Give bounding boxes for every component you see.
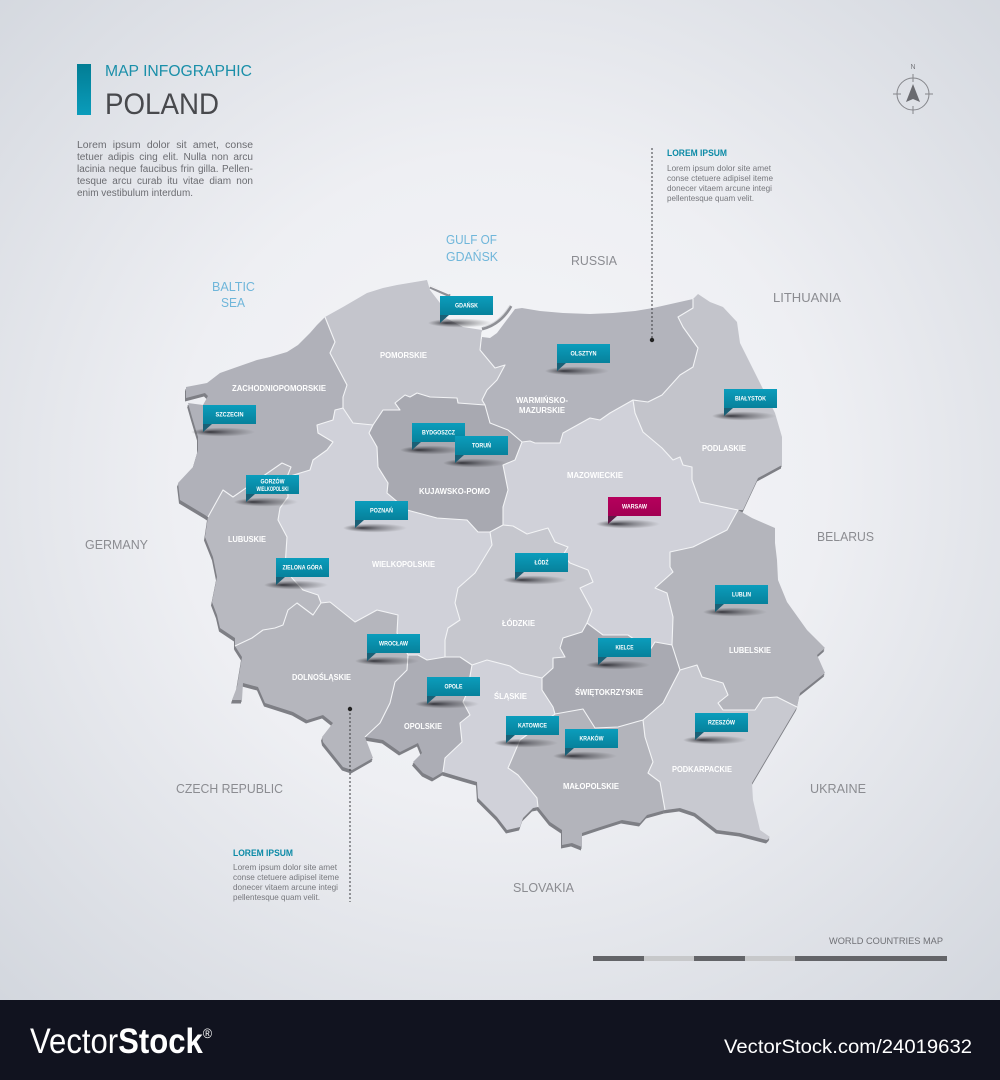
region: Lubelskie (655, 510, 825, 710)
country labels: CZECH REPUBLIC (176, 781, 283, 796)
region: Malopolskie (508, 709, 665, 847)
region labels: KUJAWSKO-POMO (419, 487, 490, 496)
pin: Warsaw capital (596, 497, 661, 528)
title: POLAND (105, 88, 219, 121)
pin: Szczecin: SZCZECIN (216, 412, 244, 418)
region: Lubuskie (205, 463, 321, 646)
region: Opolskie (365, 655, 472, 778)
callout: bottom left: donecer vitaem arcune integi (233, 882, 338, 892)
pin: Zielona Gora (264, 558, 329, 590)
pin: Bydgoszcz: BYDGOSZCZ (422, 430, 455, 436)
region: Pomorskie (325, 280, 505, 425)
region: Slaskie (443, 660, 555, 830)
pin: Opole (415, 677, 480, 708)
callout: bottom left: pellentesque quam velit. (233, 892, 320, 902)
region labels: OPOLSKIE (404, 722, 443, 731)
pin: Rzeszow (683, 713, 748, 744)
sea labels: GULF OF (446, 232, 497, 247)
pin: Bialystok (712, 389, 777, 420)
pin: Gorzow Wielkopolski: WIELKOPOLSKI (256, 487, 289, 493)
country labels: UKRAINE (810, 781, 866, 796)
country labels: RUSSIA (571, 253, 617, 268)
sea labels: GDAŃSK (446, 249, 498, 264)
pin: Lodz (503, 553, 568, 584)
pin: Warsaw capital: WARSAW (622, 504, 647, 510)
intro paragraph (77, 140, 253, 199)
region labels: PODKARPACKIE (672, 765, 733, 774)
callout: top right: donecer vitaem arcune integi (667, 183, 772, 193)
pin: Gdansk: GDAŃSK (455, 302, 479, 310)
region labels: ŚLĄSKIE (494, 692, 528, 701)
region: Podlaskie (633, 294, 782, 510)
footer logo: ® (203, 1025, 213, 1041)
region labels (228, 351, 772, 791)
region labels: WIELKOPOLSKIE (372, 560, 436, 569)
pin: Kielce: KIELCE (616, 646, 634, 652)
scale caption: WORLD COUNTRIES MAP (829, 936, 943, 946)
region labels: ZACHODNIOPOMORSKIE (232, 384, 327, 393)
pin: Poznan: POZNAŃ (370, 506, 393, 514)
pin: Rzeszow: RZESZÓW (708, 718, 735, 726)
country labels (85, 253, 874, 895)
scale bar (593, 936, 947, 961)
region labels: MAZOWIECKIE (567, 471, 624, 480)
intro paragraph: tetuer adipis cing elit. Nulla non arcu (77, 152, 253, 163)
region: Warminsko-Mazurskie (480, 299, 698, 443)
intro paragraph: enim vestibulum interdum. (77, 188, 193, 199)
pin: Lublin (703, 585, 768, 616)
title kicker: MAP INFOGRAPHIC (105, 63, 252, 80)
title accent bar (77, 64, 91, 115)
pin: Krakow (553, 729, 618, 760)
region labels: MAŁOPOLSKIE (563, 782, 620, 791)
intro paragraph: tesque arcu curab itu vitae diam non (77, 176, 253, 187)
country labels: LITHUANIA (773, 290, 841, 305)
region labels: DOLNOŚLĄSKIE (292, 673, 352, 682)
intro paragraph: Lorem ipsum dolor sit amet, conse (77, 140, 253, 151)
header title block (77, 63, 252, 121)
region: Dolnoslaskie (232, 602, 408, 770)
region: Podkarpackie (643, 665, 797, 840)
region labels: LUBELSKIE (729, 646, 772, 655)
region: Zachodniopomorskie (178, 317, 347, 517)
pin: Katowice: KATOWICE (518, 724, 547, 730)
sea labels (212, 232, 498, 310)
sea labels: SEA (221, 295, 245, 310)
footer image id: VectorStock.com/24019632 (724, 1037, 972, 1058)
callout: top right: LOREM IPSUM (667, 148, 727, 158)
callout: top right (650, 148, 773, 342)
pin: Poznan (343, 501, 408, 532)
pin: Gorzow Wielkopolski (234, 475, 299, 506)
callout: bottom left: conse ctetuere adipisel iteme (233, 872, 339, 882)
callout: bottom left: Lorem ipsum dolor site amet (233, 862, 338, 872)
callout: bottom left: LOREM IPSUM (233, 848, 293, 858)
footer logo: VectorStock (30, 1022, 213, 1061)
country labels: SLOVAKIA (513, 880, 574, 895)
region labels: POMORSKIE (380, 351, 428, 360)
pin: Lodz: ŁÓDŹ (534, 558, 549, 566)
region labels: LUBUSKIE (228, 535, 267, 544)
callout: top right: pellentesque quam velit. (667, 193, 754, 203)
icon: compass (893, 64, 933, 114)
region labels: WARMIŃSKO- (516, 396, 568, 405)
callout: bottom left (233, 707, 352, 902)
pin: Szczecin (191, 405, 256, 436)
region: Wielkopolskie (278, 408, 492, 660)
region: Mazowieckie (503, 400, 738, 650)
pin: Bydgoszcz (400, 423, 465, 454)
pin: Olsztyn (545, 344, 610, 376)
pin: Torun (443, 436, 508, 468)
map of Poland (178, 280, 825, 847)
pin: Olsztyn: OLSZTYN (570, 352, 596, 358)
pin: Opole: OPOLE (444, 684, 462, 690)
pin: Torun: TORUŃ (472, 442, 491, 450)
pin: Kielce (586, 638, 651, 670)
region labels: PODLASKIE (702, 444, 747, 453)
country labels: BELARUS (817, 529, 874, 544)
intro paragraph: lacinia neque faucibus frin gilla. Pellen- (77, 164, 253, 175)
country labels: GERMANY (85, 537, 148, 552)
region labels: ŚWIĘTOKRZYSKIE (575, 688, 644, 697)
pin: Gorzow Wielkopolski: GORZÓW (260, 478, 285, 486)
pin: Zielona Gora: ZIELONA GÓRA (282, 564, 323, 572)
pin: Gdansk (428, 296, 493, 328)
footer bar (0, 1000, 1000, 1080)
coastal spits (430, 286, 511, 329)
callout: top right: conse ctetuere adipisel iteme (667, 173, 773, 183)
pin: Lublin: LUBLIN (732, 592, 751, 598)
region: Lodzkie (445, 525, 593, 678)
sea labels: BALTIC (212, 279, 255, 294)
icon: compass: N (910, 64, 916, 71)
callout: top right: Lorem ipsum dolor site amet (667, 163, 772, 173)
pin: Wroclaw (355, 634, 420, 666)
pin: Katowice (494, 716, 559, 748)
region labels: ŁÓDZKIE (502, 619, 536, 628)
pin: Bialystok: BIAŁYSTOK (735, 396, 767, 402)
pin: Krakow: KRAKÓW (580, 734, 604, 742)
region: Kujawsko-Pomorskie (369, 393, 522, 532)
region borders (208, 299, 797, 810)
pin: Wroclaw: WROCŁAW (379, 642, 408, 648)
region labels: MAZURSKIE (519, 406, 566, 415)
region: Swietokrzyskie (542, 623, 680, 728)
